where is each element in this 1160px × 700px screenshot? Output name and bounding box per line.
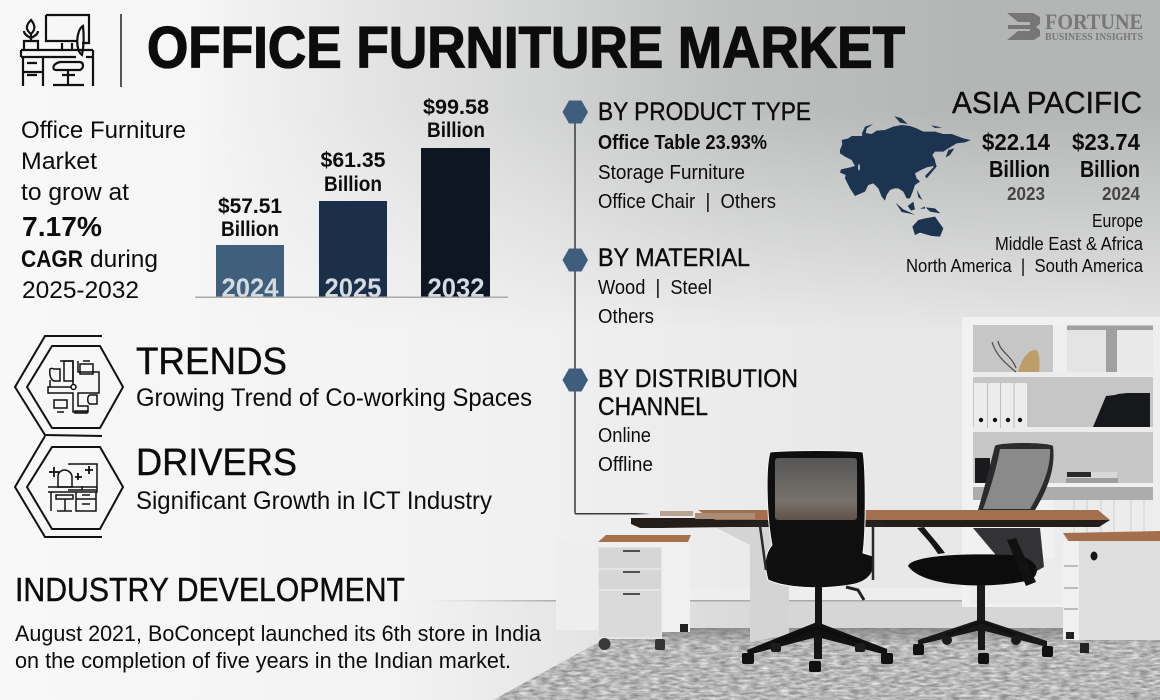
hexagon marker: product bbox=[562, 100, 588, 124]
by material: Others bbox=[598, 306, 654, 328]
by material: BY MATERIAL bbox=[598, 244, 750, 272]
industry development text: August 2021, BoConcept launched its 6th store in India bbox=[15, 621, 542, 646]
trends heading: TRENDS bbox=[136, 341, 287, 383]
trends text: Growing Trend of Co-working Spaces bbox=[136, 384, 532, 412]
industry development text bbox=[15, 621, 542, 673]
bar 2032 bbox=[421, 96, 490, 303]
by product type: Office Chair | Others bbox=[598, 191, 776, 213]
desk leg bbox=[715, 527, 789, 642]
other regions: Europe bbox=[1092, 211, 1143, 231]
desk top bbox=[631, 510, 1110, 528]
divider bbox=[120, 14, 122, 87]
by material bbox=[598, 244, 750, 328]
drivers text: Significant Growth in ICT Industry bbox=[136, 487, 492, 515]
bar 2032: 2032 bbox=[428, 273, 484, 303]
by distribution channel: Online bbox=[598, 425, 651, 447]
bar 2024: $57.51 bbox=[218, 195, 282, 218]
other regions: Middle East & Africa bbox=[995, 234, 1144, 254]
hexagon marker: material bbox=[562, 248, 588, 272]
industry development text: on the completion of five years in the Indian market. bbox=[15, 648, 511, 673]
2023 value: 2023 bbox=[1007, 184, 1045, 204]
industry development heading: INDUSTRY DEVELOPMENT bbox=[15, 571, 405, 608]
logo: Fortune Business Insights: FORTUNE bbox=[1045, 9, 1143, 34]
by product type bbox=[598, 98, 811, 213]
icon: office desk bbox=[21, 15, 93, 86]
bar chart bbox=[195, 96, 508, 303]
other regions bbox=[906, 211, 1144, 276]
by distribution channel: Offline bbox=[598, 454, 653, 476]
black books bbox=[1093, 393, 1150, 427]
bar 2024 bbox=[216, 195, 284, 303]
bar 2024: Billion bbox=[221, 218, 279, 241]
by distribution channel: CHANNEL bbox=[598, 393, 708, 421]
logo: Fortune Business Insights: BUSINESS INSIGHTS bbox=[1045, 32, 1143, 43]
other regions: North America | South America bbox=[906, 256, 1144, 276]
market growth text: CAGR bbox=[21, 246, 83, 273]
2024 value: 2024 bbox=[1102, 184, 1140, 204]
market growth text: to grow at bbox=[21, 179, 129, 206]
icon: workstation bbox=[48, 464, 97, 511]
back cabinet bbox=[556, 539, 599, 630]
bar 2025: $61.35 bbox=[320, 149, 386, 172]
bookshelf bbox=[962, 317, 1160, 607]
asia pacific heading: ASIA PACIFIC bbox=[952, 85, 1142, 120]
market growth text: during bbox=[90, 246, 158, 273]
by product type: BY PRODUCT TYPE bbox=[598, 98, 811, 126]
by product type: Office Table 23.93% bbox=[598, 132, 767, 154]
hexagon marker: distribution bbox=[562, 368, 588, 392]
market growth text: Office Furniture bbox=[21, 117, 186, 144]
chair: front bbox=[742, 450, 893, 672]
2024 value: $23.74 bbox=[1072, 129, 1140, 155]
market growth text bbox=[21, 117, 186, 304]
logo: Fortune Business Insights bbox=[1007, 9, 1143, 43]
segment timeline bbox=[562, 100, 651, 514]
shelf binders bbox=[974, 383, 1027, 428]
title: OFFICE FURNITURE MARKET bbox=[147, 16, 905, 80]
bar 2032: Billion bbox=[427, 119, 485, 142]
2023 value bbox=[982, 129, 1050, 204]
map: asia pacific bbox=[840, 116, 971, 237]
rug bbox=[490, 625, 1160, 700]
bar 2025 bbox=[319, 149, 387, 303]
drivers heading: DRIVERS bbox=[136, 442, 297, 484]
icon: co-working bbox=[48, 361, 99, 413]
2024 value bbox=[1072, 129, 1140, 204]
by material: Wood | Steel bbox=[598, 277, 712, 299]
bar 2025: Billion bbox=[324, 173, 382, 196]
hexagon frame: drivers bbox=[15, 436, 123, 537]
bar 2024: 2024 bbox=[222, 273, 278, 303]
drawer cabinet right bbox=[1063, 531, 1160, 653]
drawer pedestal left bbox=[598, 535, 691, 650]
chair: rear bbox=[908, 443, 1054, 664]
shelf ornament bbox=[992, 341, 1040, 372]
by distribution channel bbox=[598, 365, 798, 476]
market growth text: Market bbox=[21, 148, 97, 175]
bar 2032: $99.58 bbox=[423, 96, 489, 119]
asia pacific values bbox=[982, 129, 1140, 204]
hexagon frame: trends bbox=[15, 336, 123, 436]
by product type: Storage Furniture bbox=[598, 162, 745, 184]
bar 2025: 2025 bbox=[324, 273, 382, 303]
by distribution channel: BY DISTRIBUTION bbox=[598, 365, 798, 393]
market growth text: 7.17% bbox=[22, 211, 102, 242]
2023 value: Billion bbox=[989, 156, 1050, 182]
2023 value: $22.14 bbox=[982, 129, 1050, 155]
market growth text: 2025-2032 bbox=[22, 277, 139, 304]
2024 value: Billion bbox=[1080, 156, 1140, 182]
stacked books bbox=[1066, 472, 1118, 483]
